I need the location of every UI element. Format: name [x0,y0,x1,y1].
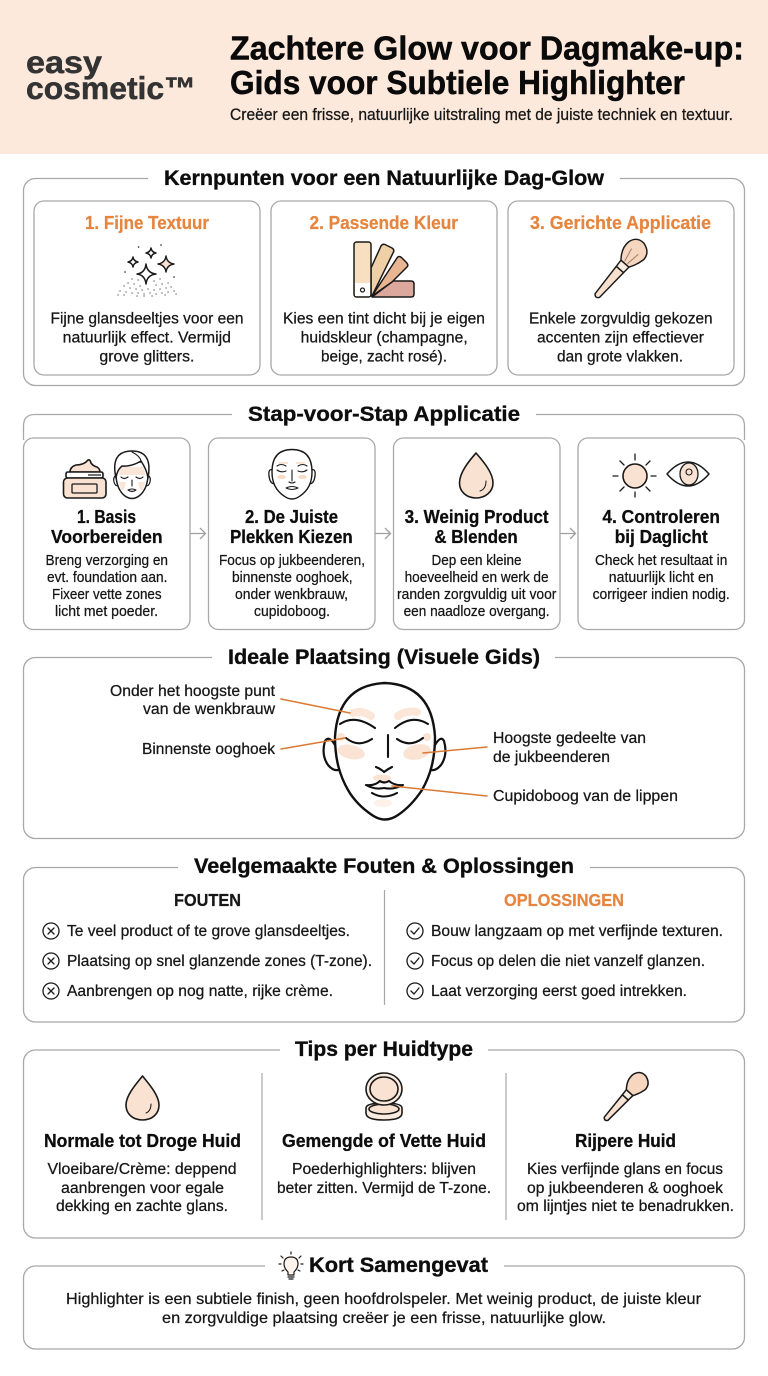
step 1: 1. Basis [77,506,136,527]
heading: kernpunten: Kernpunten voor een Natuurlijke Dag-Glow [164,166,604,190]
column: oplossingen: Focus op delen die niet vanzelf glanzen. [431,953,705,970]
summary text [66,1291,702,1327]
panel: kort samengevat [24,1252,744,1349]
column: fouten: Te veel product of te grove glansdeeltjes. [67,923,350,940]
icon: check [407,983,423,999]
summary text: Highlighter is een subtiele finish, geen hoofdrolspeler. Met weinig product, de juiste kleur [66,1291,702,1308]
step 2: onder wenkbrauw, [235,586,348,603]
column: rijpere huid: om lijntjes niet te benadrukken. [517,1198,734,1215]
step 1: Voorbereiden [51,526,163,547]
column: normale tot droge [44,1076,241,1215]
card: fijne textuur: Fijne glansdeeltjes voor een [50,310,244,328]
callout: cupidoboog: Cupidoboog van de lippen [493,788,678,805]
arrow [376,528,390,539]
panel: ideale plaatsing [24,645,744,838]
header banner [0,0,768,154]
icon: colour swatches [354,242,414,297]
column: fouten: FOUTEN [174,890,241,910]
icon: cross [43,923,59,939]
step 3 [394,438,560,630]
logo [26,44,196,106]
column: oplossingen: Bouw langzaam op met verfijnde texturen. [431,923,723,940]
step 3: 3. Weinig Product [405,506,549,527]
icon: sparkles [118,245,176,296]
subtitle: Creëer een frisse, natuurlijke uitstraling met de juiste techniek en textuur. [230,106,733,124]
callout: wenkbrauw [110,683,276,718]
panel: kernpunten [24,166,744,386]
icon: face [269,450,315,499]
step 4 [578,438,744,630]
step 4: bij Daglicht [615,526,708,547]
card: gerichte applicatie: accenten zijn effectiever [537,330,704,346]
step 3: hoeveelheid en werk de [405,569,549,586]
column: fouten: Aanbrengen op nog natte, rijke crème. [67,983,333,1000]
icon: light bulb [279,1252,303,1279]
step 1: Fixeer vette zones [52,586,162,603]
icon: brush [598,1069,652,1126]
step 2 [208,438,375,630]
callout: jukbeenderen: de jukbeenderen [493,749,610,766]
step 2: 2. De Juiste [245,506,338,527]
card: passende kleur: 2. Passende Kleur [310,212,458,233]
callout: ooghoek: Binnenste ooghoek [142,741,275,758]
title: Gids voor Subtiele Highlighter [230,65,685,102]
arrow [560,528,576,539]
step 4: natuurlijk licht en [609,569,714,586]
icon: eye [667,462,709,486]
icon: compact [366,1073,402,1120]
card: fijne textuur: grove glitters. [99,348,194,366]
step 1: evt. foundation aan. [47,569,168,586]
column: rijpere huid: Rijpere Huid [575,1131,676,1151]
card: gerichte applicatie: dan grote vlakken. [557,348,683,366]
step 2: cupidoboog. [254,603,330,620]
icon: face with towel [114,451,150,498]
column: oplossingen: OPLOSSINGEN [504,890,624,910]
callout: wenkbrauw: van de wenkbrauw [143,701,276,718]
step 3: een naadloze overgang. [404,603,550,620]
column: gemengde of vette [277,1073,491,1197]
diagram: face [324,683,445,820]
card: gerichte applicatie: Enkele zorgvuldig gekozen [529,310,713,328]
column: gemengde of vette: Gemengde of Vette Huid [282,1131,486,1151]
card: gerichte applicatie: 3. Gerichte Applicatie [530,212,711,233]
panel: stap-voor-stap [24,402,744,630]
callout: jukbeenderen: Hoogste gedeelte van [493,730,646,747]
callout: wenkbrauw: Onder het hoogste punt [110,683,276,700]
callout lines [281,699,487,796]
icon: sponge drop [460,453,493,498]
card: passende kleur [271,201,497,375]
step 4: corrigeer indien nodig. [593,586,730,603]
heading: kort samengevat: Kort Samengevat [309,1253,488,1277]
arrow [190,528,206,539]
callout: jukbeenderen [493,730,646,766]
column: oplossingen [407,890,723,1000]
card: gerichte applicatie [508,201,734,375]
column: rijpere huid: Kies verfijnde glans en focus [527,1161,723,1178]
icon: check [407,923,423,939]
column: gemengde of vette: beter zitten. Vermijd de T-zone. [277,1180,491,1197]
card: fijne textuur: natuurlijk effect. Vermijd [63,330,231,346]
icon: check [407,953,423,969]
card: passende kleur: beige, zacht rosé). [321,348,447,366]
card: passende kleur: Kies een tint dicht bij je eigen [283,310,485,328]
heading: stap-voor-stap: Stap-voor-Stap Applicatie [248,402,520,426]
column: normale tot droge: Vloeibare/Crème: deppend [48,1161,236,1178]
icon: drop [126,1076,159,1120]
step 1 [24,438,190,630]
step 3: randen zorgvuldig uit voor [397,586,556,603]
column: normale tot droge: dekking en zachte glans. [56,1198,228,1215]
column: gemengde of vette: Poederhighlighters: blijven [292,1161,476,1178]
step 4: Check het resultaat in [595,552,727,569]
logo: easy [26,44,103,80]
column: oplossingen: Laat verzorging eerst goed intrekken. [431,983,687,1000]
heading: fouten en oplossingen: Veelgemaakte Fouten & Oplossingen [194,854,574,878]
summary text: en zorgvuldige plaatsing creëer je een frisse, natuurlijke glow. [162,1310,606,1327]
panel: fouten en oplossingen [24,854,744,1022]
icon: cross [43,983,59,999]
card: passende kleur: huidskleur (champagne, [301,330,468,346]
step 2: Focus op jukbeenderen, [219,552,365,569]
icon: cream jar [64,460,106,498]
step 1: licht met poeder. [55,603,158,620]
heading: ideale plaatsing: Ideale Plaatsing (Visuele Gids) [228,645,540,669]
icon: sun [613,454,656,497]
column: rijpere huid [517,1069,734,1215]
icon: makeup brush [587,235,652,305]
heading: tips: Tips per Huidtype [295,1037,473,1061]
title: Zachtere Glow voor Dagmake-up: [230,30,744,68]
column: fouten: Plaatsing op snel glanzende zones (T-zone). [67,953,372,970]
step 1: Breng verzorging en [46,552,168,569]
step 2: Plekken Kiezen [230,526,353,547]
column: rijpere huid: op jukbeenderen & ooghoek [527,1180,723,1197]
logo: cosmetic™ [26,70,196,106]
column: fouten [43,890,372,1000]
panel: tips per huidtype [24,1037,744,1238]
step 3: Dep een kleine [432,552,522,569]
title [230,30,744,102]
column: normale tot droge: aanbrengen voor egale [61,1180,224,1197]
card: fijne textuur: 1. Fijne Textuur [85,212,209,233]
icon: cross [43,953,59,969]
card: fijne textuur [34,201,260,375]
step 2: binnenste ooghoek, [232,569,353,586]
step 3: & Blenden [434,526,518,547]
step 4: 4. Controleren [602,506,720,527]
column: normale tot droge: Normale tot Droge Huid [44,1131,241,1151]
